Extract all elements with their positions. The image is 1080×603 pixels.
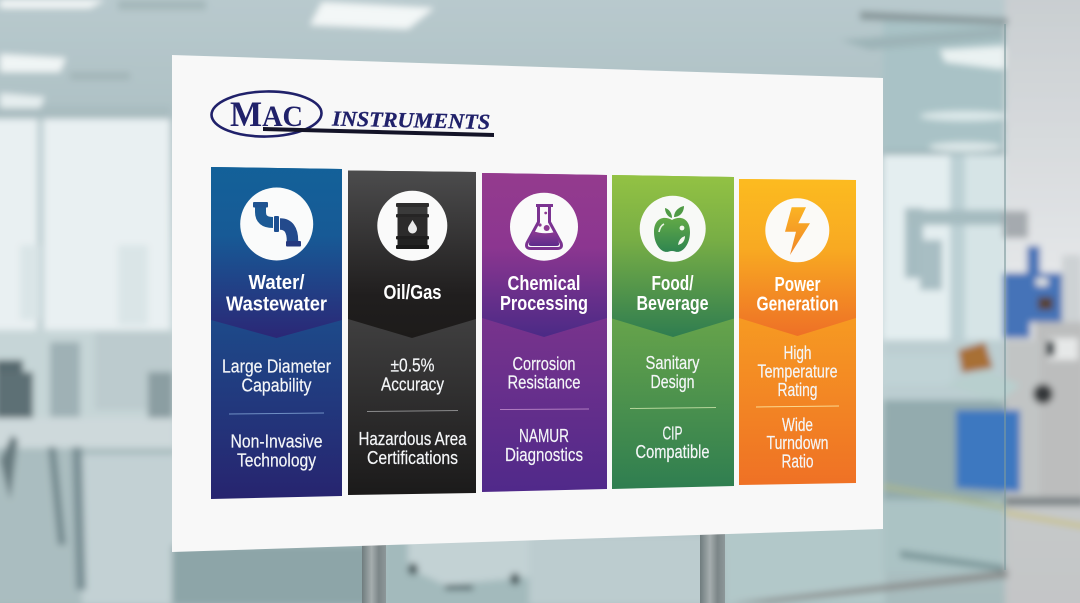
feature: hazardous area: Hazardous Area bbox=[358, 428, 467, 449]
logo oval bbox=[211, 91, 322, 137]
feature: NAMUR diagnostics bbox=[505, 425, 583, 465]
feature: NAMUR diagnostics: Diagnostics bbox=[505, 444, 583, 465]
icon: pipe bbox=[240, 188, 313, 260]
heading bbox=[756, 273, 838, 316]
feature: hazardous area bbox=[358, 428, 467, 468]
heading: Oil/Gas bbox=[384, 281, 442, 304]
feature: non-invasive bbox=[230, 430, 322, 470]
feature: corrosion resistance: Corrosion bbox=[512, 353, 576, 374]
feature: accuracy bbox=[381, 354, 445, 394]
panel: Power Generation bbox=[739, 179, 856, 485]
feature: corrosion resistance: Resistance bbox=[508, 372, 580, 392]
feature: corrosion resistance bbox=[508, 353, 580, 392]
feature: wide turndown ratio bbox=[766, 414, 828, 472]
feature: non-invasive: Non-Invasive bbox=[230, 430, 322, 452]
sign board bbox=[172, 55, 883, 552]
feature: large diameter bbox=[222, 356, 331, 396]
feature: high temperature rating: Rating bbox=[778, 379, 818, 400]
panel: Water/Wastewater bbox=[211, 167, 342, 499]
panel: Food/Beverage bbox=[612, 175, 734, 489]
icon: lightning bolt bbox=[765, 198, 829, 262]
panel: Oil/Gas bbox=[348, 170, 476, 495]
logo word INSTRUMENTS: INSTRUMENTS bbox=[331, 106, 490, 134]
feature: CIP compatible bbox=[636, 422, 710, 462]
feature: wide turndown ratio: Wide bbox=[782, 414, 813, 435]
feature: CIP compatible: Compatible bbox=[636, 441, 710, 462]
heading: Beverage bbox=[636, 292, 708, 315]
heading: Generation bbox=[756, 292, 838, 316]
logo letters MAC: MAC bbox=[230, 94, 303, 134]
feature: wide turndown ratio: Turndown bbox=[766, 432, 828, 453]
feature: high temperature rating: Temperature bbox=[758, 360, 838, 382]
heading bbox=[636, 272, 708, 315]
feature: non-invasive: Technology bbox=[237, 450, 317, 470]
feature: sanitary design: Design bbox=[650, 371, 694, 392]
feature: accuracy: Accuracy bbox=[381, 374, 445, 394]
feature: high temperature rating: High bbox=[784, 342, 812, 363]
heading: Processing bbox=[500, 292, 588, 315]
heading bbox=[500, 272, 588, 315]
panel: Chemical Processing bbox=[482, 173, 607, 492]
feature: large diameter: Capability bbox=[242, 374, 312, 396]
icon: flask bbox=[510, 193, 578, 261]
icon: oil barrel bbox=[377, 191, 447, 261]
feature: CIP compatible: CIP bbox=[662, 422, 682, 444]
heading: Food/ bbox=[652, 272, 694, 295]
heading: Wastewater bbox=[226, 292, 327, 316]
feature: wide turndown ratio: Ratio bbox=[782, 450, 814, 472]
logo underline swoosh bbox=[263, 127, 494, 137]
logo: MAC Instruments bbox=[211, 91, 494, 137]
feature: sanitary design: Sanitary bbox=[646, 352, 700, 373]
icon: apple bbox=[640, 196, 706, 262]
feature: hazardous area: Certifications bbox=[367, 447, 458, 468]
feature: accuracy: ±0.5% bbox=[390, 354, 434, 376]
heading: Chemical bbox=[508, 272, 580, 295]
feature: large diameter: Large Diameter bbox=[222, 356, 331, 376]
feature: sanitary design bbox=[646, 352, 700, 392]
feature: high temperature rating bbox=[758, 342, 838, 400]
feature: NAMUR diagnostics: NAMUR bbox=[519, 425, 569, 446]
sign post left bbox=[362, 540, 386, 603]
heading: Power bbox=[774, 273, 821, 296]
sign post right bbox=[700, 528, 725, 603]
heading: Water/ bbox=[248, 271, 305, 294]
heading bbox=[226, 271, 327, 316]
